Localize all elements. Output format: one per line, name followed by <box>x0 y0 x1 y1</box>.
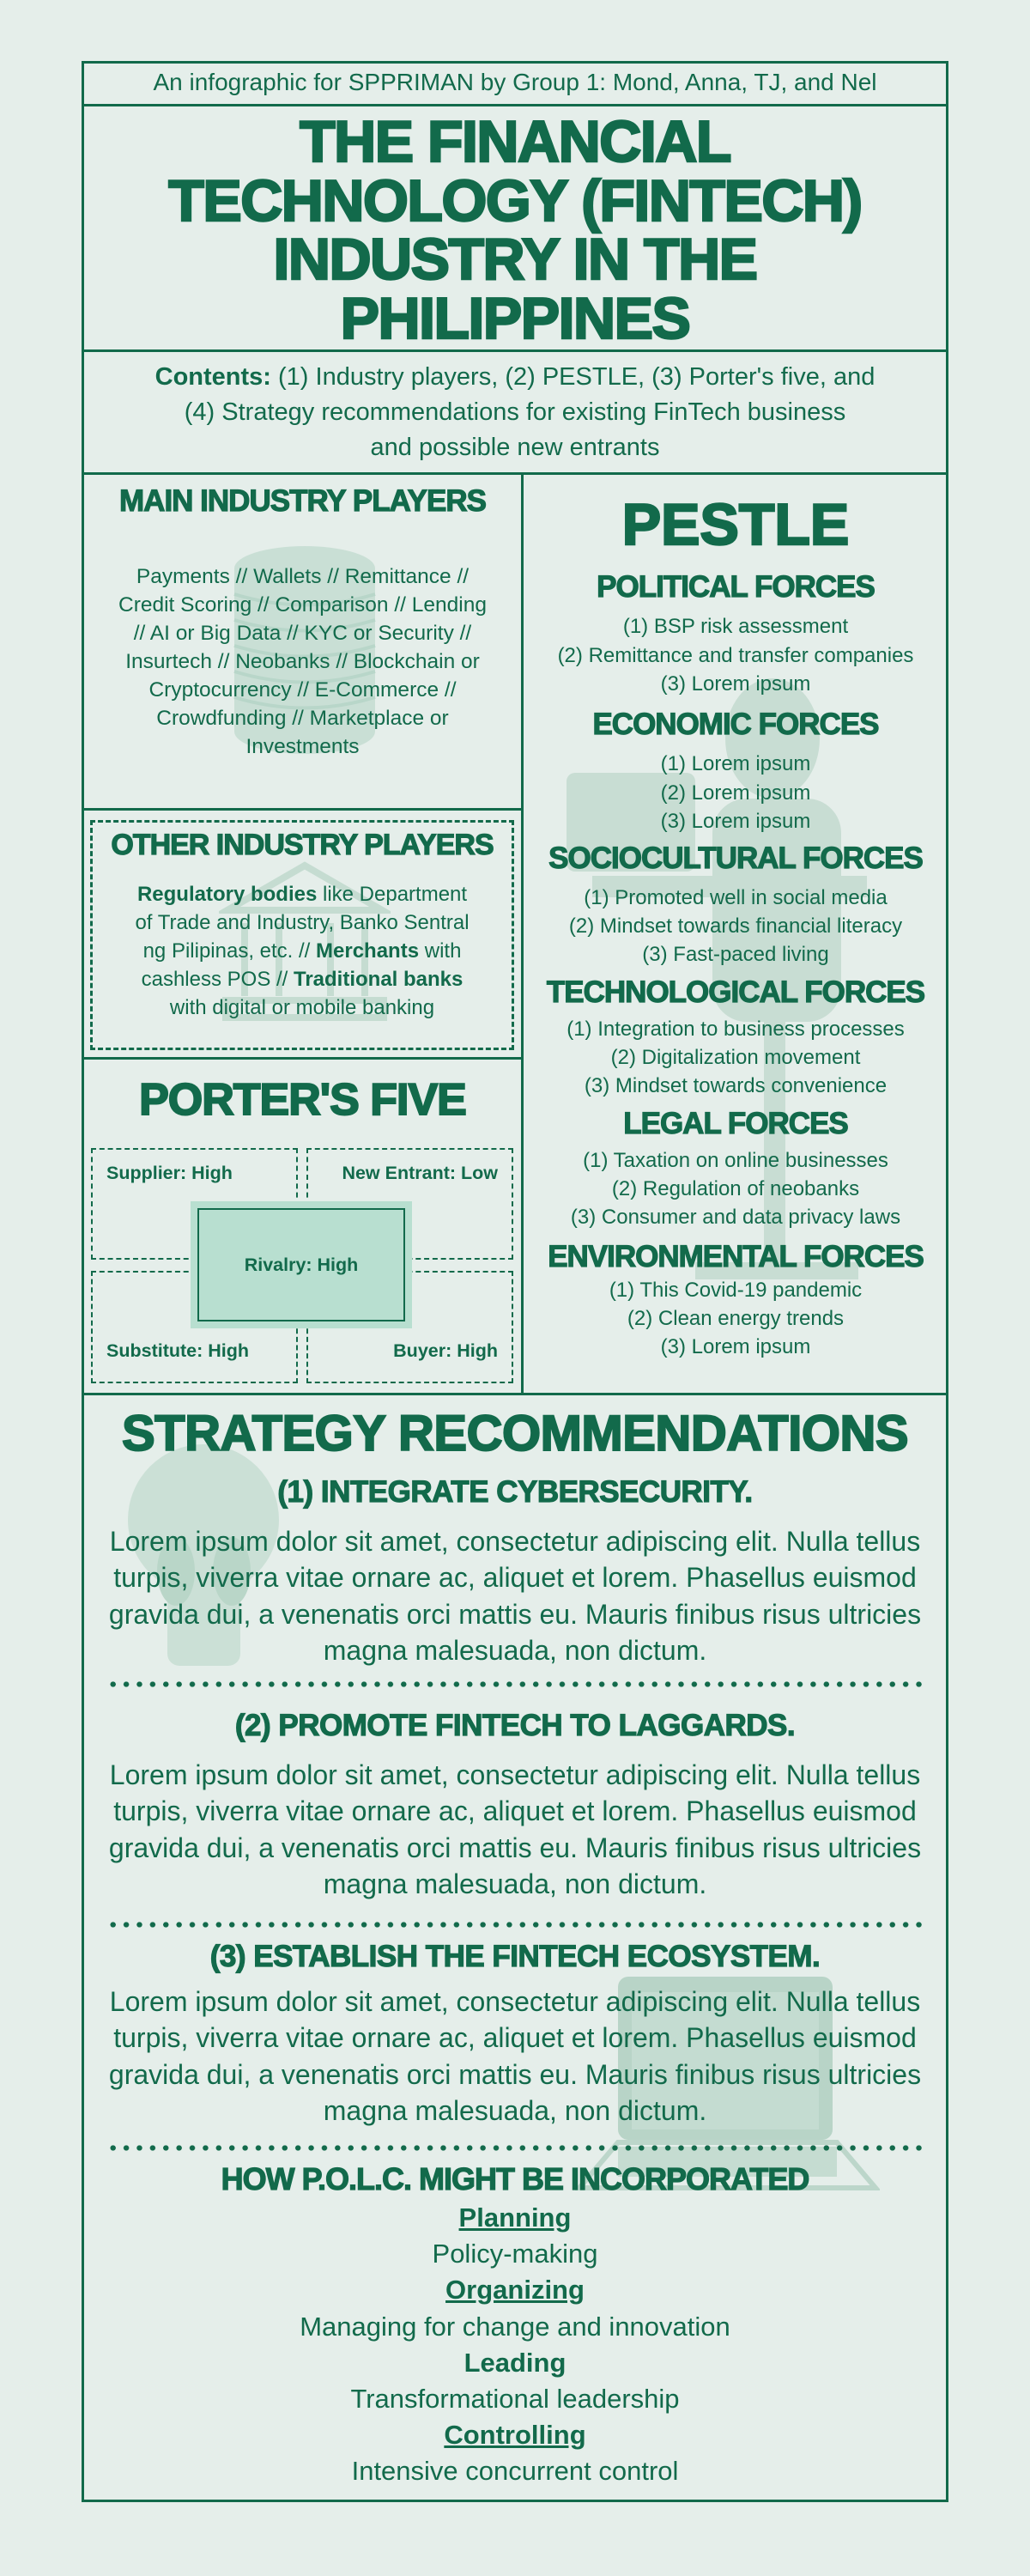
economic forces: (3) Lorem ipsum <box>661 810 810 833</box>
sociocultural forces: SOCIOCULTURAL FORCES <box>548 841 923 875</box>
environmental forces: (2) Clean energy trends <box>627 1307 844 1330</box>
list of players: Payments // Wallets // Remittance // <box>136 565 469 588</box>
economic forces: (2) Lorem ipsum <box>661 781 810 804</box>
heading: strategy recommendations: STRATEGY RECOMMENDATIONS <box>122 1406 908 1461</box>
contents text: and possible new entrants <box>371 434 659 461</box>
other players text: ng Pilipinas, etc. // Merchants with <box>143 939 461 963</box>
rivalry box <box>191 1201 412 1328</box>
technological forces: (3) Mindset towards convenience <box>585 1074 887 1097</box>
economic forces <box>592 708 879 833</box>
strategy 1: gravida dui, a venenatis orci mattis eu. Mauris finibus risus ultricies <box>109 1599 921 1630</box>
other players text: of Trade and Industry, Banko Sentral <box>135 911 470 934</box>
POLC section: Leading <box>464 2348 566 2378</box>
heading: porter's five: PORTER'S FIVE <box>139 1075 466 1125</box>
POLC section <box>221 2161 809 2486</box>
watermark: light bulb <box>128 1444 279 1666</box>
technological forces <box>546 975 925 1097</box>
legal forces: (1) Taxation on online businesses <box>583 1149 888 1172</box>
strategy 2 <box>109 1709 921 1899</box>
label: substitute: Substitute: High <box>106 1340 249 1361</box>
environmental forces <box>548 1240 924 1358</box>
political forces: (1) BSP risk assessment <box>623 615 848 638</box>
strategy 3: turpis, viverra vitae ornare ac, aliquet et lorem. Phasellus euismod <box>113 2022 917 2053</box>
legal forces: LEGAL FORCES <box>623 1107 848 1140</box>
rivalry box: Rivalry: High <box>245 1254 358 1274</box>
POLC section: Managing for change and innovation <box>300 2312 730 2342</box>
strategy 2: (2) PROMOTE FINTECH TO LAGGARDS. <box>235 1709 795 1742</box>
strategy 2: gravida dui, a venenatis orci mattis eu. Mauris finibus risus ultricies <box>109 1832 921 1863</box>
POLC section: HOW P.O.L.C. MIGHT BE INCORPORATED <box>221 2161 809 2196</box>
label: supplier: Supplier: High <box>106 1163 233 1183</box>
strategy 1: Lorem ipsum dolor sit amet, consectetur adipiscing elit. Nulla tellus <box>110 1526 920 1557</box>
panel: main industry players <box>118 484 487 758</box>
panel: PESTLE <box>546 492 925 1358</box>
political forces: POLITICAL FORCES <box>597 570 875 604</box>
label: new entrant: New Entrant: Low <box>342 1163 498 1183</box>
other players text: with digital or mobile banking <box>170 996 434 1019</box>
title <box>168 109 862 350</box>
other players text <box>135 883 470 1019</box>
strategy 3: gravida dui, a venenatis orci mattis eu. Mauris finibus risus ultricies <box>109 2059 921 2090</box>
strategy 3: (3) ESTABLISH THE FINTECH ECOSYSTEM. <box>210 1940 820 1973</box>
frame: outer border and grid <box>82 61 948 2502</box>
list of players: Investments <box>245 735 360 758</box>
label: buyer: Buyer: High <box>393 1340 498 1361</box>
watermark: laptop <box>575 1977 880 2190</box>
technological forces: TECHNOLOGICAL FORCES <box>547 975 924 1009</box>
environmental forces: (3) Lorem ipsum <box>661 1335 810 1358</box>
technological forces: (1) Integration to business processes <box>566 1018 905 1041</box>
list of players: Cryptocurrency // E-Commerce // <box>148 678 457 702</box>
legal forces: (3) Consumer and data privacy laws <box>571 1206 900 1229</box>
list of players: Insurtech // Neobanks // Blockchain or <box>125 650 480 673</box>
strategy 1: turpis, viverra vitae ornare ac, aliquet et lorem. Phasellus euismod <box>113 1562 917 1593</box>
POLC section: Planning <box>459 2202 571 2233</box>
heading: PESTLE: PESTLE <box>622 492 849 557</box>
sociocultural forces <box>548 841 924 966</box>
title: TECHNOLOGY (FINTECH) <box>168 168 862 234</box>
heading: other industry players: OTHER INDUSTRY PLAYERS <box>111 829 494 861</box>
strategy 3: magna malesuada, non dictum. <box>324 2095 706 2126</box>
political forces: (3) Lorem ipsum <box>661 672 810 696</box>
watermark: bank building <box>219 862 391 1021</box>
strategy 1 <box>109 1475 921 1666</box>
panel: other industry players <box>90 820 514 1050</box>
sociocultural forces: (1) Promoted well in social media <box>584 886 888 909</box>
contents text <box>155 363 875 461</box>
environmental forces: ENVIRONMENTAL FORCES <box>548 1240 924 1273</box>
technological forces: (2) Digitalization movement <box>611 1046 860 1069</box>
strategy 1: (1) INTEGRATE CYBERSECURITY. <box>277 1475 753 1509</box>
strategy 2: turpis, viverra vitae ornare ac, aliquet et lorem. Phasellus euismod <box>113 1795 917 1826</box>
political forces <box>558 570 913 696</box>
list of players <box>118 565 487 758</box>
list of players: // AI or Big Data // KYC or Security // <box>134 622 471 645</box>
title: THE FINANCIAL <box>300 109 730 174</box>
title: INDUSTRY IN THE <box>273 227 757 292</box>
watermark: woman with laptop <box>566 678 867 1279</box>
title: PHILIPPINES <box>341 285 689 350</box>
strategy 1: magna malesuada, non dictum. <box>324 1635 706 1666</box>
heading: main industry players: MAIN INDUSTRY PLAYERS <box>119 484 486 518</box>
economic forces: ECONOMIC FORCES <box>592 708 879 741</box>
list of players: Credit Scoring // Comparison // Lending <box>118 593 487 617</box>
header credit line: An infographic for SPPRIMAN by Group 1: Mond, Anna, TJ, and Nel <box>153 69 877 95</box>
panel: porter's five <box>91 1075 513 1383</box>
strategy 2: magna malesuada, non dictum. <box>324 1868 706 1899</box>
POLC section: Controlling <box>444 2420 586 2450</box>
legal forces: (2) Regulation of neobanks <box>612 1177 859 1200</box>
list of players: Crowdfunding // Marketplace or <box>156 707 449 730</box>
environmental forces: (1) This Covid-19 pandemic <box>609 1279 862 1302</box>
other players text: cashless POS // Traditional banks <box>142 968 463 991</box>
POLC section: Policy-making <box>433 2239 597 2269</box>
strategy 3: Lorem ipsum dolor sit amet, consectetur adipiscing elit. Nulla tellus <box>110 1986 920 2017</box>
POLC section: Transformational leadership <box>350 2384 680 2414</box>
strategy 3 <box>109 1940 921 2126</box>
legal forces <box>571 1107 900 1229</box>
contents text: Contents: (1) Industry players, (2) PESTLE, (3) Porter's five, and <box>155 363 875 391</box>
POLC section: Intensive concurrent control <box>352 2456 678 2486</box>
sociocultural forces: (2) Mindset towards financial literacy <box>569 914 902 938</box>
political forces: (2) Remittance and transfer companies <box>558 644 913 666</box>
economic forces: (1) Lorem ipsum <box>661 752 810 775</box>
sociocultural forces: (3) Fast-paced living <box>642 943 829 966</box>
strategy 2: Lorem ipsum dolor sit amet, consectetur adipiscing elit. Nulla tellus <box>110 1759 920 1790</box>
other players text: Regulatory bodies like Department <box>137 883 467 906</box>
porter diagram <box>91 1148 513 1383</box>
POLC section: Organizing <box>445 2275 585 2305</box>
watermark: coin stack <box>233 546 376 754</box>
panel: strategy recommendations <box>109 1406 921 2486</box>
contents text: (4) Strategy recommendations for existing FinTech business <box>185 398 845 426</box>
